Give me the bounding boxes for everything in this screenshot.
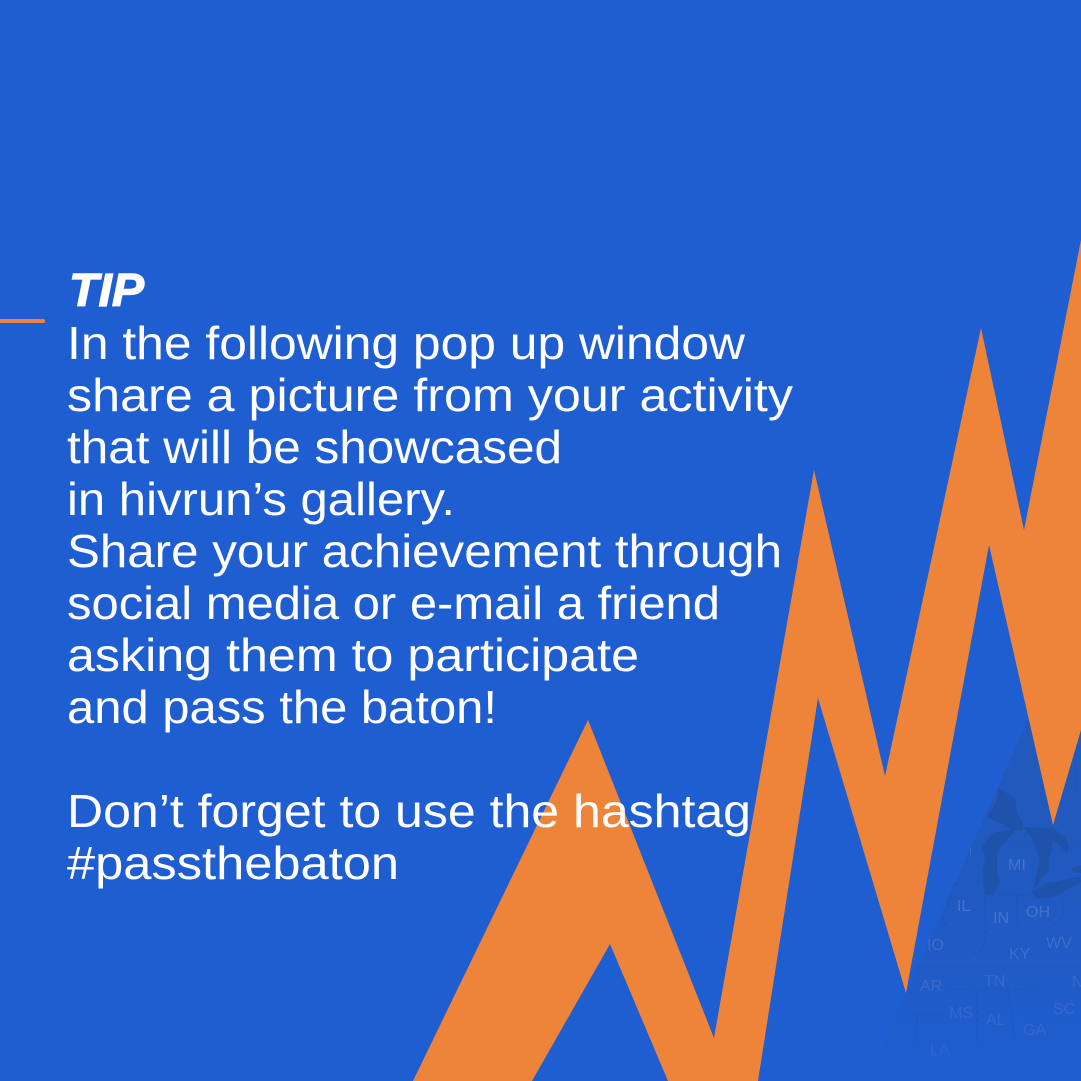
map: state labels: GA bbox=[1023, 1022, 1046, 1039]
tip body text: Share your achievement through bbox=[67, 525, 782, 577]
map: state labels: MS bbox=[949, 1005, 973, 1022]
map: state labels: OH bbox=[1026, 904, 1050, 921]
tip body text bbox=[67, 317, 793, 733]
tip body text: that will be showcased bbox=[67, 421, 562, 473]
map: state labels: MI bbox=[1008, 857, 1026, 874]
tip body text: and pass the baton! bbox=[67, 681, 497, 733]
hashtag reminder text: Don’t forget to use the hashtag bbox=[67, 785, 751, 837]
map: state labels: AL bbox=[986, 1012, 1006, 1029]
map: state labels: IN bbox=[993, 910, 1009, 927]
map: state labels: IO bbox=[927, 937, 944, 954]
map: state borders bbox=[913, 760, 1081, 1057]
map: state labels: IL bbox=[957, 898, 970, 915]
map: state labels: LA bbox=[930, 1042, 950, 1059]
map: state labels: AR bbox=[920, 978, 942, 995]
map: state labels: KY bbox=[1009, 946, 1031, 963]
tip body text: share a picture from your activity bbox=[67, 369, 793, 421]
heading: TIP: TIP bbox=[69, 264, 144, 316]
map of eastern United States bbox=[866, 640, 1081, 1081]
map: state labels: SC bbox=[1053, 1001, 1075, 1018]
hashtag reminder text bbox=[67, 785, 751, 889]
orange accent line bbox=[0, 319, 45, 323]
orange zigzag baton line bbox=[413, 240, 1081, 1081]
tip body text: In the following pop up window bbox=[67, 317, 746, 369]
map: state labels: WV bbox=[1046, 935, 1072, 952]
map: state labels: TN bbox=[984, 973, 1005, 990]
map: state labels bbox=[920, 846, 1081, 1059]
tip body text: asking them to participate bbox=[67, 629, 639, 681]
hashtag reminder text: #passthebaton bbox=[67, 837, 399, 889]
map: great lakes bbox=[982, 788, 1081, 899]
tip body text: in hivrun’s gallery. bbox=[67, 473, 455, 525]
map: state labels: I bbox=[969, 846, 972, 858]
tip body text: social media or e-mail a friend bbox=[67, 577, 720, 629]
